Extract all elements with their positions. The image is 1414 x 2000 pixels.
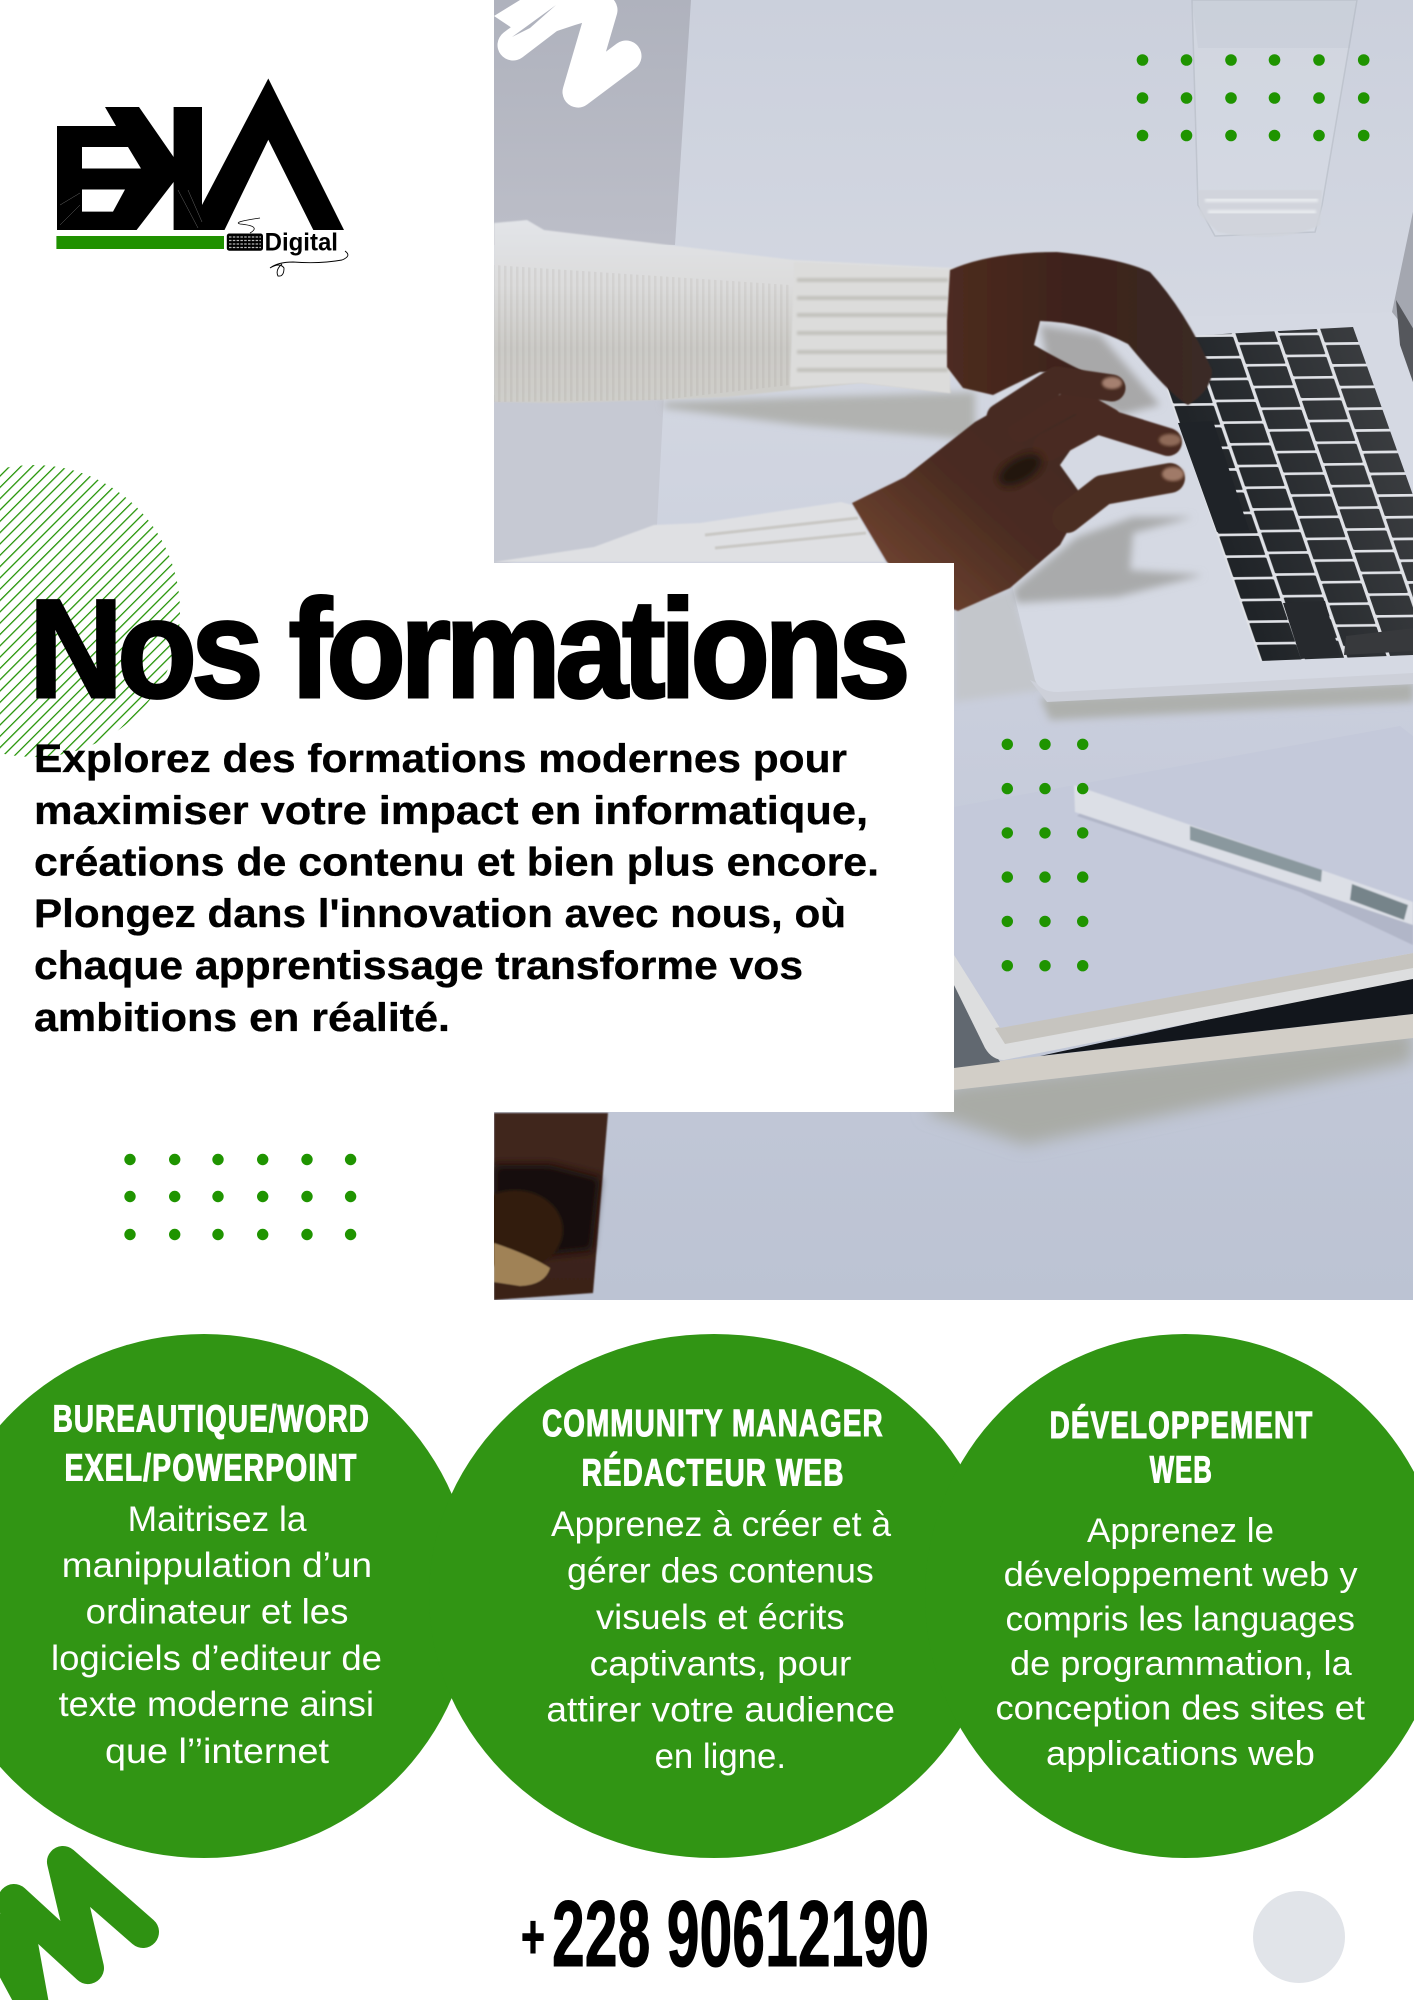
keys: [1149, 327, 1414, 661]
course 3 description: de programmation, la: [1010, 1645, 1352, 1683]
shadow left of laptop: [954, 590, 1042, 702]
digits: 228 90612190: [552, 1881, 929, 1986]
logo swirl: [270, 251, 348, 276]
green ovals for the three courses: [0, 1334, 1414, 1858]
course 1 description: Maitrisez la: [128, 1500, 307, 1539]
course 3 description: développement web y: [1004, 1556, 1358, 1594]
laptop screen lid: [1392, 212, 1413, 328]
grey paper strip, upper: [494, 0, 691, 245]
course 2 heading: COMMUNITY MANAGER: [542, 1403, 884, 1445]
chair leg, bottom left: [467, 1113, 608, 1300]
intro paragraph: maximiser votre impact en informatique,: [34, 789, 868, 833]
glass base: [1200, 207, 1320, 236]
background photo: hands typing on a laptop: [467, 0, 1414, 1300]
glass body: [1192, 0, 1357, 236]
dot grid, top right: [1137, 54, 1369, 141]
course 2 description: visuels et écrits: [596, 1598, 844, 1637]
logo fine lines: [60, 190, 202, 228]
laptop front shadow: [1040, 682, 1414, 720]
course 3 heading: WEB: [1150, 1450, 1213, 1492]
pen body: [1074, 785, 1413, 925]
hand shadows on laptop: [1013, 517, 1203, 603]
course 3 description: conception des sites et: [996, 1690, 1366, 1728]
sweater shadow on desk: [664, 392, 975, 440]
pale grey circle: [1253, 1891, 1345, 1983]
knuckle shadow: [993, 448, 1047, 492]
sleeve body: [494, 220, 954, 403]
logo green bar: [56, 236, 224, 249]
cuff: [790, 311, 950, 393]
hatched green circle: [0, 465, 180, 757]
knit ribs: [494, 265, 790, 402]
white title panel: [0, 563, 954, 1112]
lower large key: [1283, 601, 1340, 659]
finger behind: [1020, 400, 1110, 430]
dot grid, on notebook: [1002, 739, 1088, 971]
course 2: community manager: [542, 1403, 895, 1776]
logo: EKA Digital: [56, 78, 348, 276]
lower book pages: [954, 1014, 1413, 1090]
course 2 heading: [542, 1403, 884, 1495]
course 2 description: en ligne.: [655, 1737, 786, 1776]
course 1 description: [51, 1500, 382, 1771]
pen shadow: [1077, 805, 1413, 945]
course 3 description: compris les languages: [1006, 1600, 1355, 1638]
keyboard: [1149, 327, 1414, 661]
course 2 description: [546, 1505, 895, 1776]
desk surface: [494, 0, 1414, 1300]
course 2 heading: RÉDACTEUR WEB: [582, 1451, 844, 1495]
course 1 heading: [53, 1398, 370, 1490]
logo keyboard icon: [227, 218, 263, 251]
title: Nos formations: [29, 570, 906, 727]
pen: [1074, 785, 1413, 945]
course 1 description: logiciels d’editeur de: [51, 1639, 382, 1678]
dark shadow band: [494, 1165, 600, 1260]
intro paragraph: [34, 737, 879, 1040]
course 1 description: manippulation d’un: [62, 1546, 372, 1585]
water top: [1192, 0, 1357, 48]
left grey stack: [954, 985, 1000, 1068]
white brush scribble: [494, 0, 626, 92]
notebook cover underside: [954, 950, 1413, 1060]
rounded foot: [467, 1190, 563, 1270]
palm: [852, 385, 1095, 611]
course 3 heading: [1050, 1403, 1313, 1492]
laptop deck: [1016, 572, 1413, 692]
course 3: développement web: [996, 1403, 1366, 1773]
laptop hinge: [1396, 300, 1414, 385]
notebook page edge: [995, 953, 1413, 1044]
laptop lip: [1030, 679, 1413, 702]
course 2 description: gérer des contenus: [567, 1552, 874, 1590]
intro paragraph: Explorez des formations modernes pour: [34, 737, 847, 781]
pen tip: [1350, 884, 1408, 920]
upper sweater sleeve: [494, 220, 954, 403]
course 2 description: captivants, pour: [590, 1645, 852, 1684]
lower sweater sleeve: [494, 502, 885, 562]
course 1 heading: EXEL/POWERPOINT: [64, 1448, 358, 1490]
dot grid, lower left: [124, 1154, 356, 1240]
black book: [1040, 975, 1413, 1056]
phone number: [521, 1881, 929, 1986]
notebook shadow on desk: [925, 1030, 1413, 1145]
upper finger: [1000, 380, 1112, 417]
course 2 description: Apprenez à créer et à: [551, 1505, 892, 1544]
course 3 heading: DÉVELOPPEMENT: [1050, 1403, 1313, 1447]
intro paragraph: créations de contenu et bien plus encore.: [34, 840, 879, 884]
notebook stack: [926, 953, 1413, 1150]
notebook top: [954, 950, 1413, 1028]
shadow between hands: [1040, 325, 1160, 415]
course 1 description: que l’’internet: [105, 1732, 329, 1771]
course 1: bureautique: [51, 1398, 382, 1771]
green brush scribble, bottom left: [0, 1862, 143, 2000]
base highlights: [1205, 200, 1318, 212]
course 3 description: applications web: [1046, 1735, 1315, 1773]
course 3 description: Apprenez le: [1087, 1512, 1274, 1550]
course 3 description: [996, 1512, 1366, 1773]
intro paragraph: Plongez dans l'innovation avec nous, où: [34, 892, 846, 936]
grey paper strip, lower: [494, 395, 664, 565]
intro paragraph: chaque apprentissage transforme vos: [34, 944, 803, 988]
chair leg base: [494, 1113, 608, 1300]
course 2 description: attirer votre audience: [546, 1690, 895, 1730]
cork pad: [494, 1243, 550, 1286]
course 1 heading: BUREAUTIQUE/WORD: [53, 1398, 370, 1440]
logo letter A: [202, 78, 344, 230]
ink cartridge: [1190, 826, 1322, 882]
logo letters E and K: [57, 107, 202, 230]
index finger: [1047, 420, 1168, 447]
course 1 description: texte moderne ainsi: [59, 1685, 374, 1724]
intro paragraph: ambitions en réalité.: [34, 996, 450, 1040]
fingertips: [1162, 467, 1184, 481]
course 1 description: ordinateur et les: [86, 1593, 348, 1632]
lower hand: [852, 377, 1184, 611]
logo wordmark: Digital: [265, 228, 338, 256]
space bar: [1178, 421, 1249, 532]
upper hand: [947, 252, 1212, 405]
plus sign: +: [521, 1903, 545, 1972]
thumb: [1067, 478, 1170, 518]
lower sleeve body: [494, 502, 885, 562]
return key: [1344, 632, 1413, 655]
glass of water: [1192, 0, 1357, 237]
